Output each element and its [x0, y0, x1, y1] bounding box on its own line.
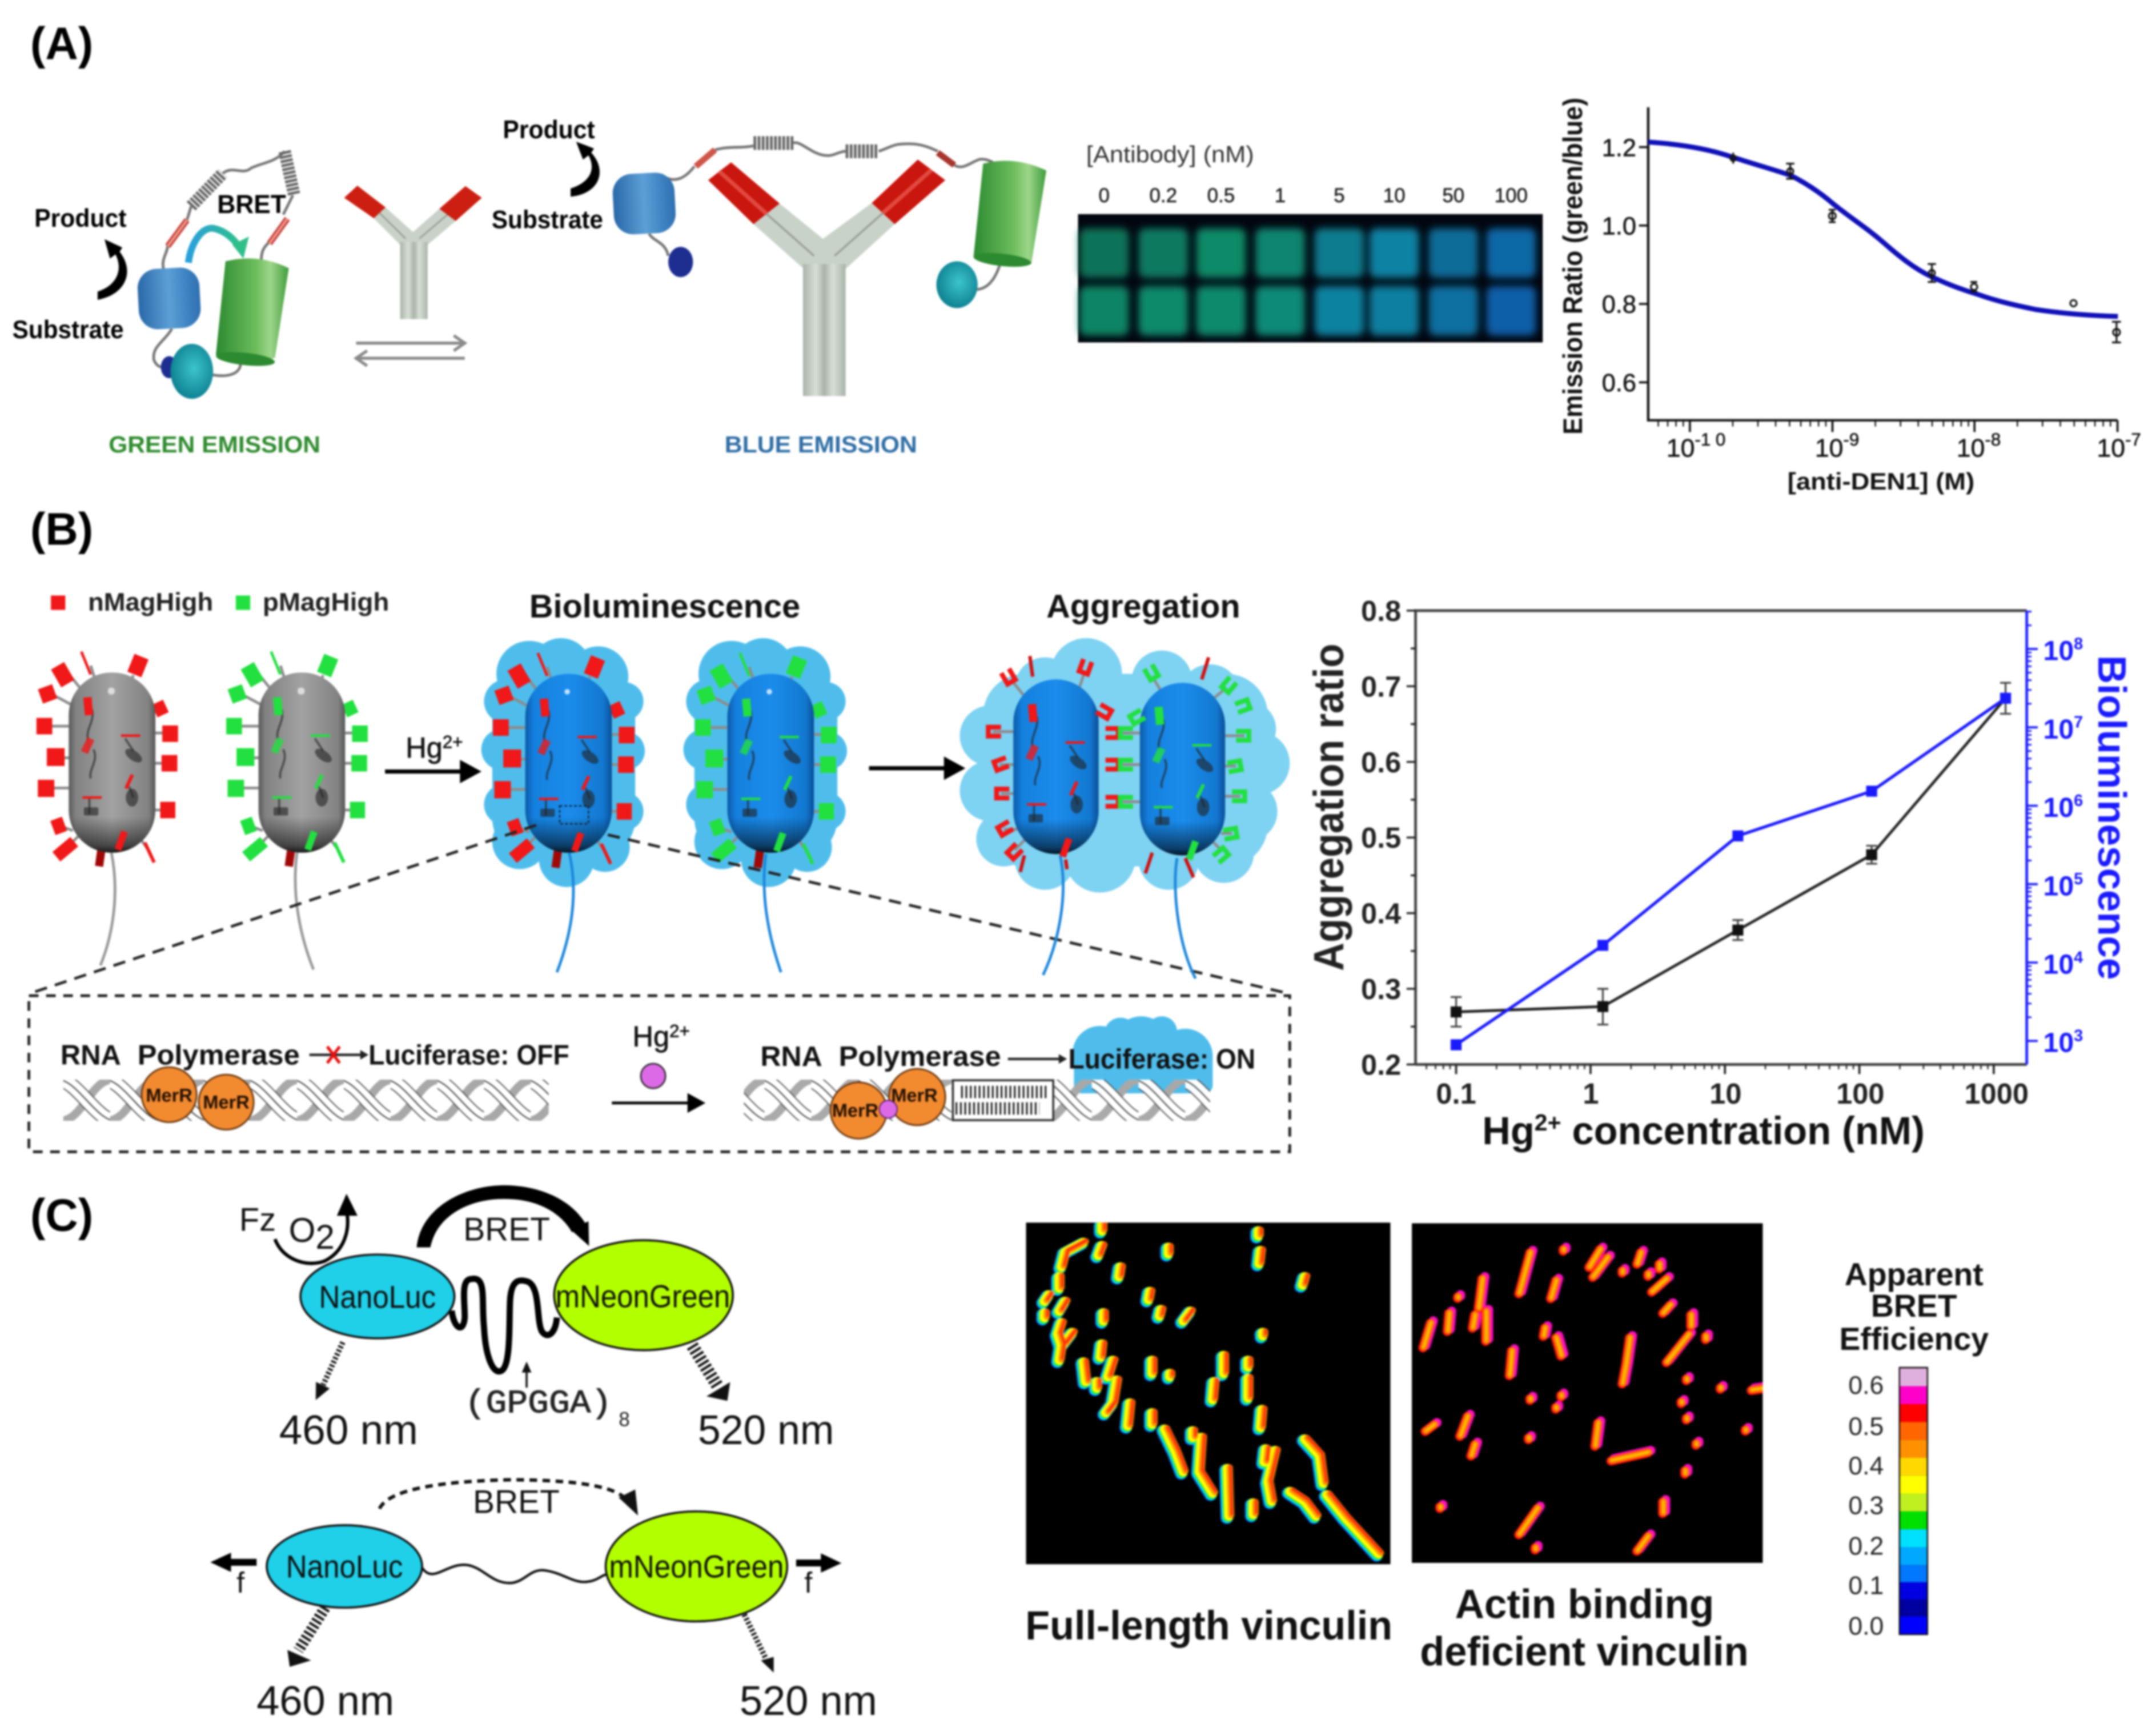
- icon: turnover arrow: [98, 239, 127, 300]
- legend label: nMagHigh: nMagHigh: [88, 588, 213, 616]
- label: GPGGA: (GPGGA): [465, 1386, 612, 1423]
- donor barrel: [136, 267, 202, 330]
- dim emission arrow: [316, 1342, 343, 1400]
- label: BRET: BRET: [463, 1212, 550, 1248]
- left sensor: green emission state: [13, 151, 294, 399]
- panel B: [29, 503, 2134, 1153]
- x axis title: [anti-DEN1] (M): [1788, 468, 1974, 495]
- x tick labels: 10: [1815, 434, 1843, 462]
- navy substrate domain: [161, 356, 178, 378]
- heading: (C): (C): [30, 1190, 93, 1241]
- scale labels: 0.6: [1848, 1372, 1884, 1400]
- y tick labels: 0.8: [1361, 595, 1401, 627]
- y tick labels: 0.8: [1602, 291, 1636, 319]
- x tick labels: [1667, 430, 2141, 462]
- right axis: [2026, 611, 2027, 1064]
- plot frame: [1416, 611, 2027, 1064]
- y tick labels: [1361, 595, 1401, 1081]
- label: mNeonGreen: mNeonGreen: [609, 1549, 784, 1584]
- data points: [1731, 153, 2121, 342]
- dose-response chart: [1558, 98, 2141, 495]
- legend title: Efficiency: [1840, 1321, 1989, 1357]
- color scale: [1899, 1367, 1928, 1635]
- luciferase glow: [1073, 1016, 1213, 1093]
- MerR proteins: off state: [142, 1067, 254, 1130]
- label: f left: f: [236, 1566, 245, 1599]
- right tick labels: 7: [2074, 713, 2083, 732]
- label: Product: Product: [34, 205, 127, 232]
- bacterium: luminescent nMagHigh: [493, 652, 635, 972]
- plate image with antibody series: [1078, 141, 1543, 342]
- right tick labels: 5: [2074, 870, 2083, 888]
- label: subscript 8: 8: [619, 1409, 630, 1431]
- x tick labels: -7: [2125, 430, 2141, 450]
- micrograph: full-length vinculin: [1026, 1222, 1390, 1564]
- scale labels: 0.2: [1848, 1533, 1884, 1561]
- MerR proteins: off state: MerR: [146, 1085, 192, 1105]
- y tick labels: 0.6: [1361, 746, 1401, 779]
- label: Actin binding deficient vinculin: deficient vinculin: [1420, 1629, 1749, 1674]
- NanoLuc: [300, 1254, 455, 1338]
- label: RNA Polymerase off: Polymerase: [138, 1039, 300, 1071]
- schematic: extended linker, low BRET: [210, 1480, 877, 1724]
- teal domain: [937, 261, 978, 308]
- label: mNeonGreen: mNeonGreen: [556, 1278, 730, 1314]
- y tick labels: 0.6: [1602, 370, 1636, 397]
- label: Substrate: Substrate: [13, 316, 124, 344]
- right tick labels: 10: [2043, 1028, 2074, 1059]
- inset frame: [29, 996, 1290, 1152]
- pointer arrow: [522, 1361, 532, 1388]
- x tick labels: -9: [1843, 430, 1859, 450]
- label: BRET: BRET: [473, 1484, 560, 1520]
- heading: Aggregation: Aggregation: [1046, 588, 1240, 625]
- right axis title: Bioluminescence: [2090, 655, 2134, 980]
- label: green emission: GREEN EMISSION: [109, 431, 320, 458]
- label: Hg2+: Hg: [632, 1020, 669, 1053]
- label: Full-length vinculin: Full-length vinculin: [1025, 1603, 1392, 1649]
- plate background: [1078, 214, 1543, 342]
- teal domain: [171, 344, 213, 399]
- y axis title: Aggregation ratio: [1304, 644, 1352, 971]
- body: red cell: [1013, 679, 1099, 854]
- heading: (B): (B): [30, 503, 93, 554]
- right tick labels: 4: [2074, 948, 2083, 967]
- concentration labels: 0.5: [1207, 185, 1235, 207]
- BRET dashed arrow: [379, 1480, 638, 1516]
- x axis title: 2+: [1535, 1109, 1561, 1136]
- thin proteins: [1020, 656, 1209, 877]
- label: RNA Polymerase on: RNA: [760, 1041, 822, 1072]
- x tick labels: 10: [1667, 434, 1695, 462]
- BRET curved arrow: [188, 228, 239, 263]
- label: Product: Product: [503, 116, 595, 144]
- x tick labels: 100: [1836, 1077, 1885, 1110]
- right tick labels: 3: [2074, 1027, 2083, 1045]
- scale labels: [1848, 1372, 1884, 1640]
- label: BRET: BRET: [217, 190, 286, 219]
- y tick labels: [1602, 134, 1636, 397]
- bottom ticks: [1427, 1064, 1994, 1074]
- label: Fz: Fz: [239, 1202, 276, 1238]
- scale labels: 0.3: [1848, 1492, 1884, 1520]
- label: RNA Polymerase off: [61, 1039, 300, 1071]
- right tick labels: 10: [2043, 871, 2074, 901]
- label: Actin binding deficient vinculin: Actin binding: [1455, 1582, 1714, 1627]
- label: blue emission: BLUE EMISSION: [725, 431, 917, 458]
- label: Hg2+: Hg: [405, 732, 443, 764]
- donor barrel: [612, 172, 677, 235]
- aggregated cell pair: [986, 656, 1253, 979]
- linker: extended: [422, 1565, 607, 1583]
- x axis title: Hg: [1482, 1109, 1535, 1153]
- y axis title: Emission Ratio (green/blue): [1558, 98, 1588, 435]
- blocked arrow: [310, 1047, 368, 1063]
- color bar legend: [1840, 1257, 1989, 1640]
- bacterium: gray nMagHigh: [37, 651, 178, 965]
- concentration labels: 10: [1383, 185, 1406, 207]
- micrograph: actin binding deficient vinculin: [1412, 1223, 1765, 1563]
- label: 460 nm: 460 nm: [256, 1678, 394, 1724]
- series: aggregation ratio: [1451, 683, 2011, 1027]
- legend label: pMagHigh: pMagHigh: [263, 588, 389, 616]
- y tick labels: 0.3: [1361, 973, 1401, 1005]
- y tick labels: 0.4: [1361, 897, 1401, 930]
- x tick labels: -1 0: [1695, 430, 1725, 450]
- bright emission arrow: [692, 1346, 730, 1401]
- open arrow: [1008, 1054, 1067, 1064]
- mNeonGreen: [554, 1240, 733, 1350]
- panel A: [13, 18, 2141, 495]
- scale labels: 0.4: [1848, 1452, 1884, 1480]
- DNA: left strand: [63, 1080, 549, 1121]
- force arrow left: [210, 1553, 256, 1572]
- stems: [993, 671, 1244, 851]
- x tick labels: 10: [2097, 434, 2125, 462]
- DNA: melted bubble: [953, 1080, 1053, 1120]
- right tick labels: [2043, 635, 2083, 1059]
- concentration labels: 5: [1334, 185, 1345, 207]
- label: 460 nm: 460 nm: [279, 1408, 418, 1453]
- x tick labels: 10: [1957, 434, 1985, 462]
- MerR proteins: on state: [830, 1069, 945, 1138]
- series: bioluminescence: [1451, 693, 2011, 1051]
- glow cloud: aggregate: [959, 638, 1290, 892]
- y tick labels: 0.2: [1361, 1048, 1401, 1081]
- panel C: [30, 1185, 1989, 1724]
- plate title: [Antibody] (nM): [1086, 141, 1254, 167]
- concentration labels: 0: [1099, 185, 1110, 207]
- label: f right: f: [804, 1566, 813, 1599]
- bacterium: luminescent pMagHigh: [695, 652, 837, 972]
- selection box on cell: [560, 806, 588, 824]
- NanoLuc: [267, 1525, 422, 1607]
- green complementary marks: [1118, 663, 1253, 865]
- body: green cell: [1140, 683, 1225, 855]
- bright emission arrow: [287, 1607, 325, 1667]
- mercury ion: [641, 1064, 665, 1088]
- arrow: to aggregation: [869, 760, 961, 776]
- BRET thick arrow: [416, 1185, 589, 1248]
- zoom dashed guide lines: [29, 825, 1290, 994]
- red complementary marks: [986, 658, 1121, 863]
- label: Luciferase ON: Luciferase: ON: [1069, 1044, 1255, 1075]
- right ticks: [2027, 612, 2038, 1041]
- force arrow right: [796, 1553, 841, 1573]
- schematic: compact linker, high BRET: [239, 1185, 834, 1453]
- MerR proteins: off state: MerR: [203, 1092, 250, 1112]
- right tick labels: 10: [2043, 714, 2074, 745]
- concentration labels: 50: [1442, 185, 1464, 207]
- icon: turnover arrow: [571, 142, 600, 197]
- x tick labels: 0.1: [1436, 1077, 1476, 1110]
- navy substrate domain: [668, 247, 693, 277]
- tails: [1043, 855, 1195, 979]
- label: O2: 2: [315, 1218, 335, 1256]
- legend: [51, 588, 389, 616]
- concentration labels: [1099, 185, 1528, 207]
- legend title: BRET: [1871, 1288, 1957, 1324]
- DNA: right strand: [744, 1080, 1210, 1121]
- legend swatch: nMagHigh: [51, 595, 65, 610]
- right tick labels: 8: [2074, 635, 2083, 653]
- dim emission arrow: [744, 1614, 774, 1673]
- linker with helices: [154, 151, 294, 376]
- label: Hg2+: 2+: [669, 1021, 690, 1041]
- label: RNA Polymerase on: [760, 1041, 1001, 1072]
- scale labels: 0.0: [1848, 1612, 1884, 1640]
- right tick labels: 10: [2043, 949, 2074, 980]
- label: NanoLuc: NanoLuc: [286, 1549, 403, 1584]
- bacterium: gray pMagHigh: [226, 651, 368, 969]
- label: RNA Polymerase off: RNA: [61, 1039, 121, 1071]
- label: 520 nm: 520 nm: [698, 1408, 834, 1453]
- MerR proteins: on state: MerR: [832, 1100, 878, 1121]
- large antibody: [708, 159, 945, 396]
- small antibody: [344, 186, 482, 319]
- dashed inset: MerR mechanism: [29, 996, 1290, 1152]
- concentration labels: 1: [1275, 185, 1286, 207]
- y tick labels: 1.2: [1602, 134, 1636, 162]
- mNeonGreen: [606, 1512, 787, 1621]
- equilibrium arrows: [356, 335, 465, 366]
- label: 520 nm: 520 nm: [740, 1678, 877, 1724]
- x tick labels: 1000: [1964, 1077, 2029, 1110]
- right tick labels: 6: [2074, 792, 2083, 810]
- legend swatch: pMagHigh: [236, 595, 250, 610]
- concentration labels: 100: [1495, 185, 1528, 207]
- heading: Bioluminescence: Bioluminescence: [529, 588, 800, 625]
- stretched linker: [649, 143, 999, 290]
- right sensor: blue emission state: [492, 116, 1046, 308]
- scale labels: 0.1: [1848, 1571, 1884, 1599]
- x tick labels: 1: [1583, 1077, 1599, 1110]
- concentration labels: 0.2: [1150, 185, 1177, 207]
- linker: folded: [452, 1279, 557, 1372]
- heading: (A): (A): [30, 18, 93, 69]
- MerR proteins: on state: MerR: [891, 1085, 938, 1105]
- y tick labels: 0.7: [1361, 670, 1401, 703]
- dual-axis chart: [1304, 595, 2134, 1153]
- wells: [1079, 228, 1536, 335]
- scale labels: 0.5: [1848, 1413, 1884, 1441]
- label: Luciferase OFF: Luciferase: OFF: [368, 1039, 569, 1071]
- glow cloud: left glowing cell: [481, 638, 645, 887]
- acceptor cylinder: [216, 258, 289, 363]
- x tick labels: [1436, 1077, 2029, 1110]
- x tick labels: -8: [1985, 430, 2001, 450]
- label: O2: O: [289, 1211, 315, 1249]
- y tick labels: 1.0: [1602, 213, 1636, 240]
- label: Substrate: Substrate: [492, 206, 603, 234]
- axes and ticks: [1639, 107, 2118, 432]
- right tick labels: 10: [2043, 792, 2074, 823]
- arrow: activation: [612, 1096, 702, 1110]
- acceptor cylinder: [974, 161, 1046, 266]
- y tick labels: 0.5: [1361, 821, 1401, 854]
- label: RNA Polymerase on: Polymerase: [839, 1041, 1001, 1072]
- inner proteins: [1026, 704, 1089, 858]
- legend title: Apparent: [1845, 1257, 1984, 1292]
- icon: substrate turnover arrow: [275, 1194, 358, 1264]
- x tick labels: 10: [1709, 1077, 1742, 1110]
- label: Actin binding deficient vinculin: [1420, 1582, 1749, 1674]
- label: Hg2+: 2+: [443, 732, 463, 752]
- label: NanoLuc: NanoLuc: [319, 1280, 436, 1315]
- glow cloud: right glowing cell: [684, 638, 847, 887]
- left ticks: [1407, 611, 1416, 1064]
- right tick labels: 10: [2043, 636, 2074, 667]
- arrow: Hg2+ step: [385, 763, 477, 780]
- fit curve: [1648, 142, 2118, 316]
- x axis title: concentration (nM): [1561, 1109, 1925, 1153]
- legend title: [1840, 1257, 1989, 1357]
